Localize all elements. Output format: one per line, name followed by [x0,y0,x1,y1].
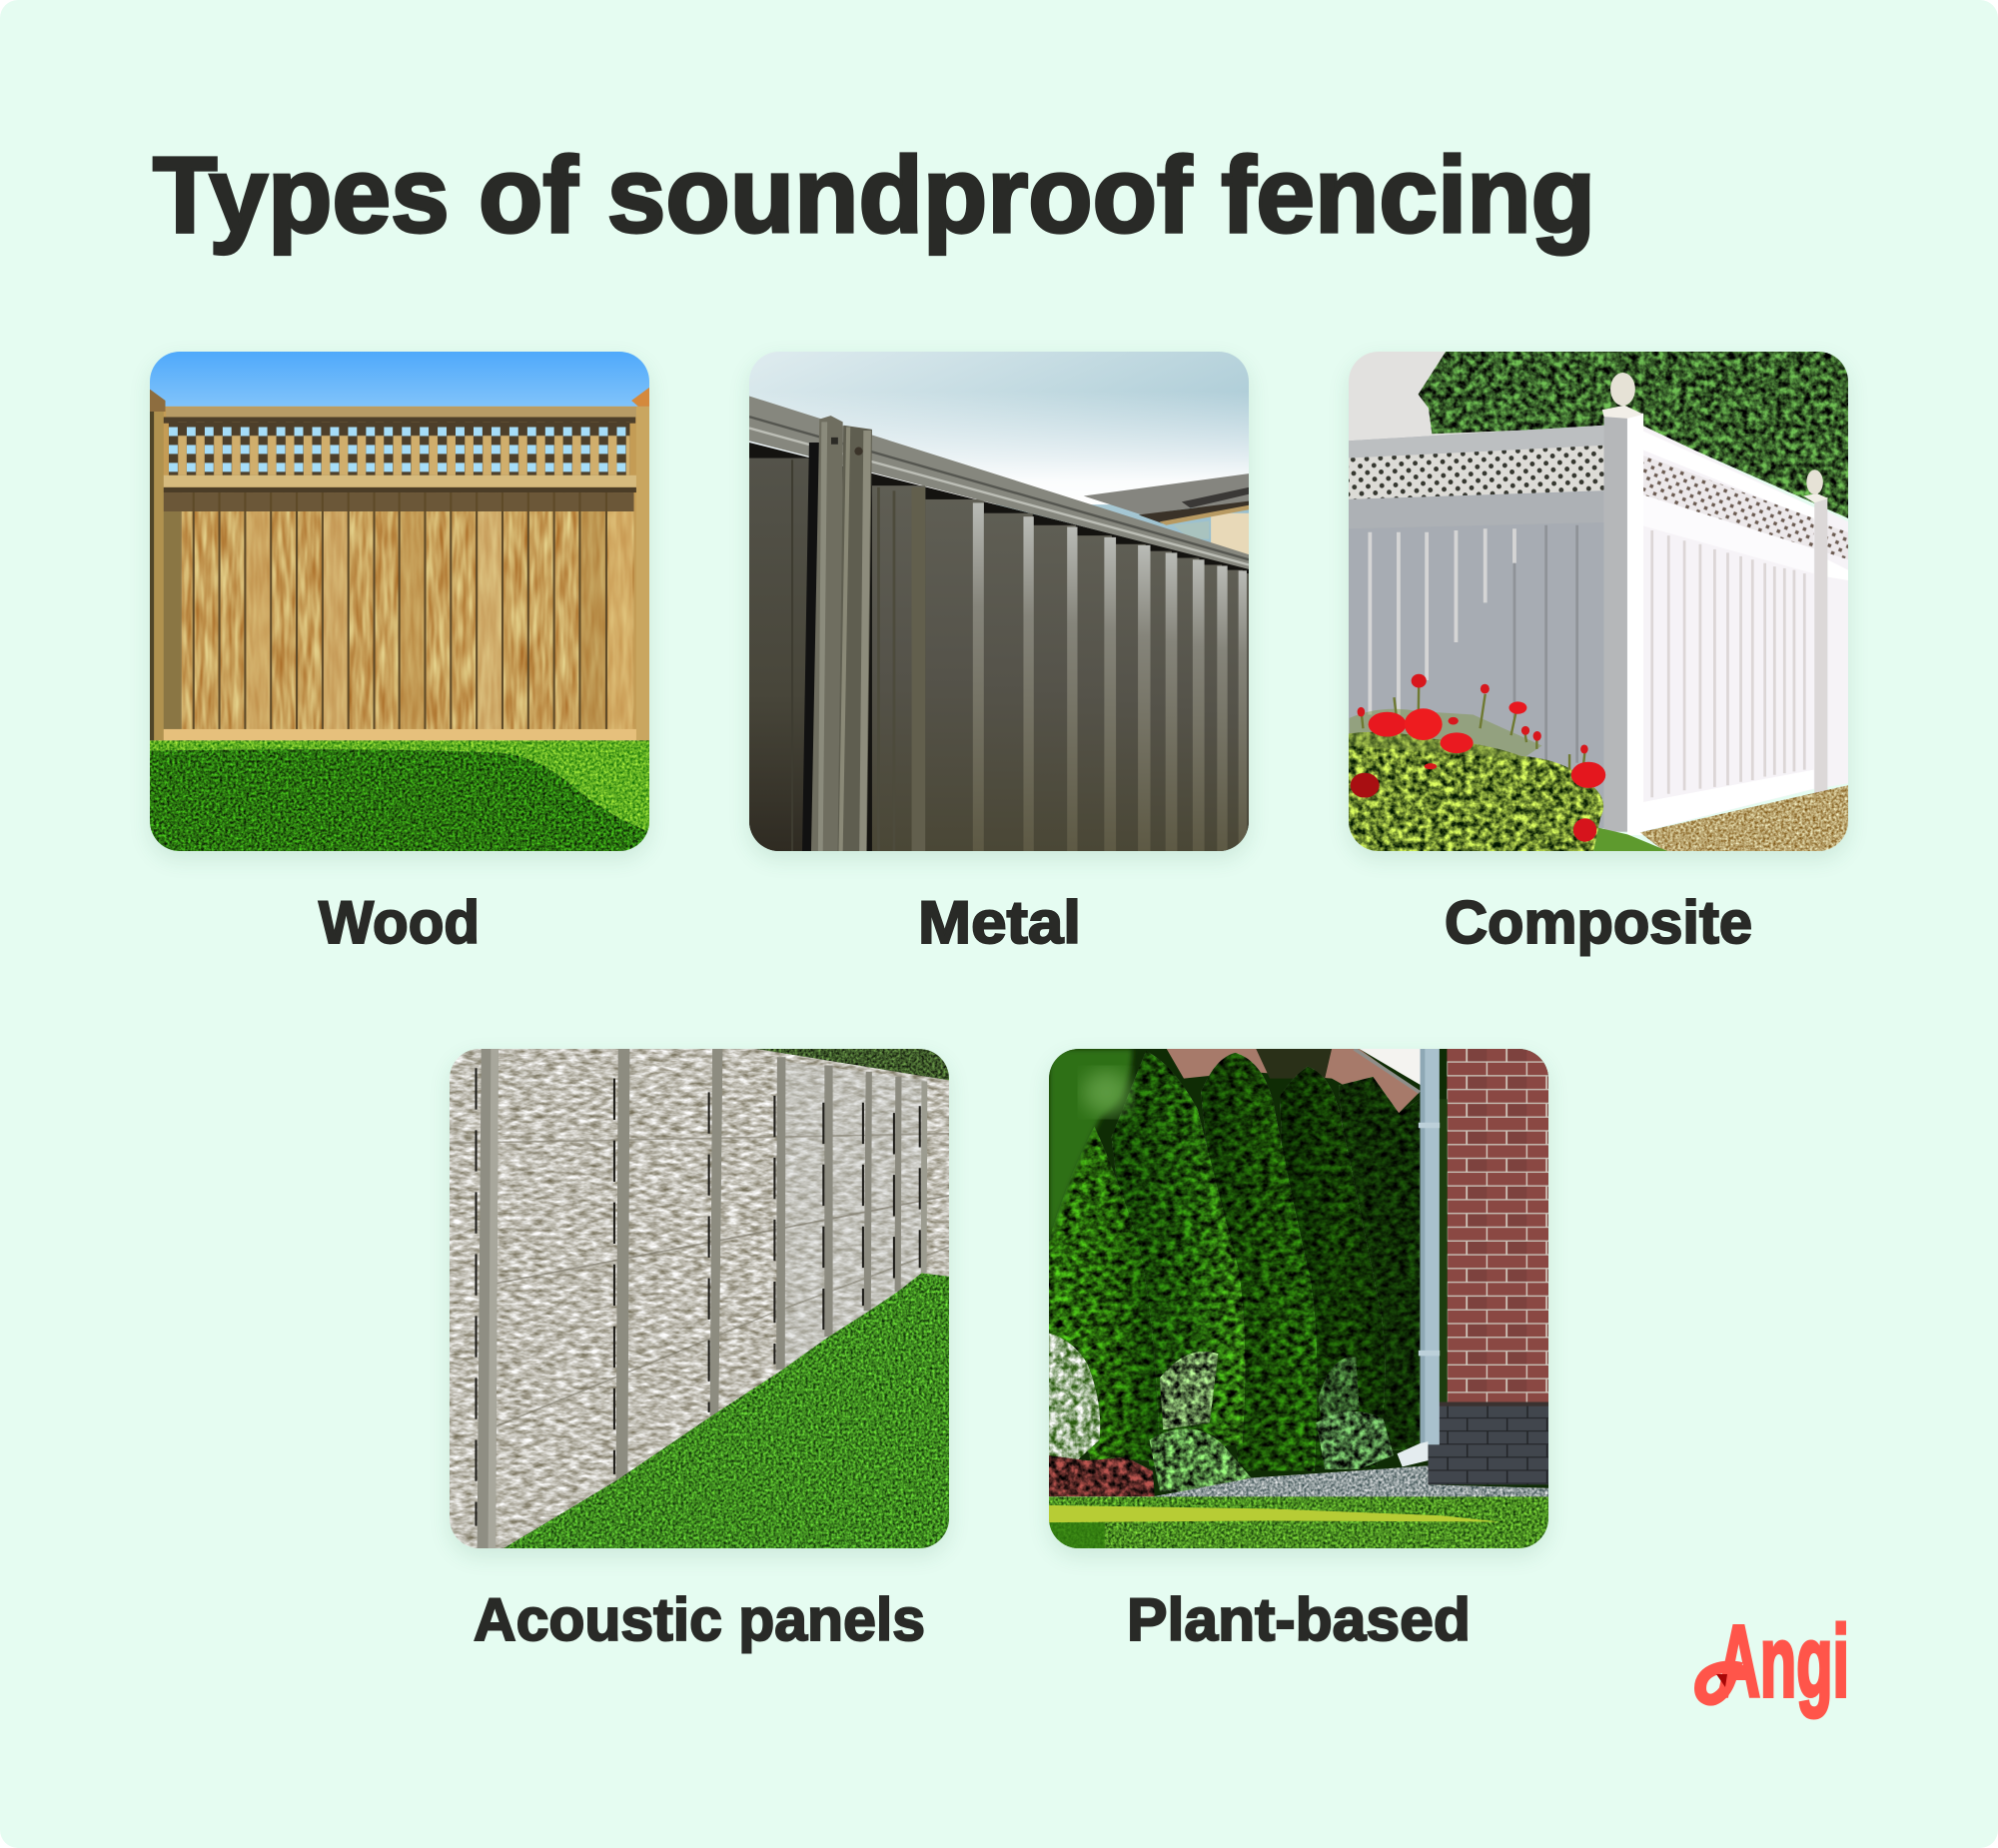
cloudy sky [749,352,1249,572]
pavement [1153,1465,1548,1501]
logo: Angi: Angi [1717,1606,1849,1718]
corner post [802,416,872,851]
sky [1349,352,1520,455]
hedge behind wall [756,1049,949,1087]
gravel and grass [1593,785,1848,851]
panel: wood fence photo [150,352,649,851]
conifer 2 [1112,1051,1245,1467]
panel: acoustic panels photo [450,1049,949,1548]
metal panels [749,443,1249,851]
blurred foreground leaves [1049,1049,1132,1247]
lawn [1049,1496,1548,1548]
conifer 4 [1280,1067,1385,1467]
fence posts [1602,373,1828,835]
label: composite: Composite [1445,889,1752,956]
concrete wall [450,1049,949,1548]
panel: metal fence photo [749,352,1249,851]
sky [150,352,649,411]
conifer 3 [1201,1053,1317,1470]
grey fence section [1349,426,1604,828]
title: Types of soundproof fencing [153,134,1595,255]
rose bush [1349,674,1605,851]
back hedge tree [1339,1077,1420,1450]
white fence section [1628,419,1848,835]
concrete posts [477,1049,927,1548]
logo: Angi [1700,1606,1849,1718]
conifer 1 [1049,1127,1160,1460]
lower dark brick [1428,1402,1548,1484]
label: acoustic panels: Acoustic panels [474,1586,925,1653]
top rail [749,396,1249,569]
neighbouring house roof [1167,1049,1422,1115]
fence body [150,388,649,749]
panel: plant-based fence photo [1049,1049,1548,1548]
label: plant-based: Plant-based [1127,1586,1471,1653]
panel: composite fence photo [1349,352,1848,851]
background [1049,1049,1548,1496]
neighbouring house [1084,473,1249,559]
garden plants [1049,1334,1394,1496]
lawn [503,1273,949,1548]
trees [1419,352,1848,518]
label: metal: Metal [918,889,1081,956]
label: wood: Wood [319,889,480,956]
drain pipe [1397,1049,1440,1466]
lawn [150,740,649,851]
brick wall [1447,1049,1548,1403]
